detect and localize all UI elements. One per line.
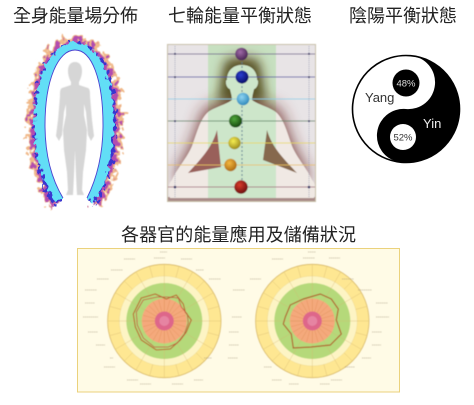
aura inner clear area	[45, 50, 103, 215]
yin dot	[390, 124, 416, 150]
arm gaps	[188, 130, 221, 173]
yin yang chart	[348, 51, 464, 167]
chakra chart	[167, 44, 316, 202]
right radar wheel	[256, 264, 369, 378]
label: 52%: 52%	[393, 132, 413, 144]
chakra orbs	[224, 48, 249, 194]
title: whole body energy field: 全身能量場分佈	[13, 6, 138, 26]
chakra level lines	[167, 46, 316, 198]
yang dot	[392, 70, 420, 96]
body green overlay	[208, 60, 276, 200]
label: Yin: Yin	[423, 116, 441, 131]
title: seven chakra balance: 七輪能量平衡狀態	[168, 6, 312, 26]
small organ label marks	[83, 252, 389, 384]
title: organ energy usage and reserve: 各器官的能量應用及儲備狀況	[121, 224, 356, 245]
label: 48%: 48%	[396, 78, 416, 90]
organ energy panel	[78, 248, 400, 392]
green central band	[208, 45, 276, 202]
label: Yang: Yang	[365, 90, 394, 105]
body shadow glow	[167, 60, 316, 202]
icon: human silhouette	[56, 62, 94, 195]
title: yin yang balance: 陰陽平衡狀態	[349, 6, 457, 26]
meditating body silhouette	[169, 65, 315, 198]
aura illustration	[40, 49, 110, 215]
left radar wheel	[108, 264, 221, 378]
